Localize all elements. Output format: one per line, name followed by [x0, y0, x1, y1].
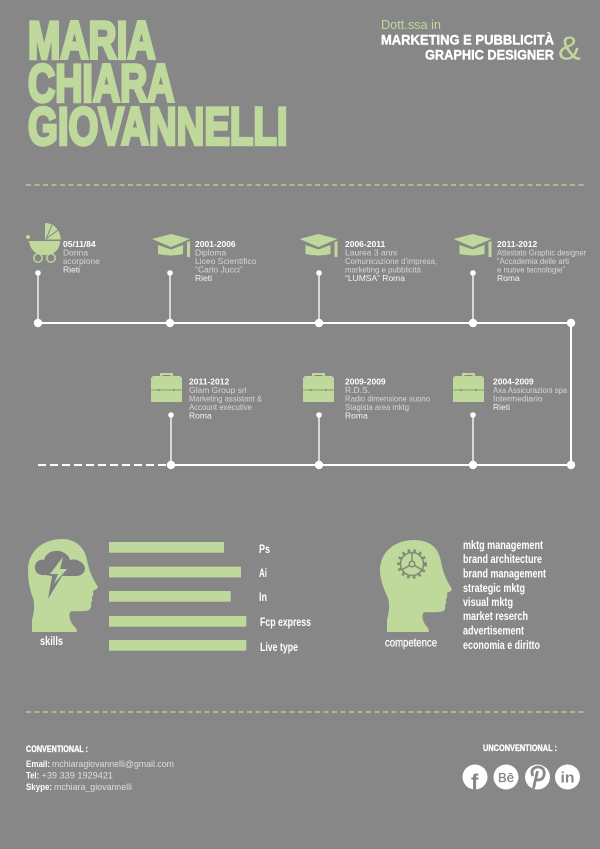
text: diploma: Diploma: [195, 248, 226, 258]
contacts: conventional: CONVENTIONAL :: [26, 744, 88, 754]
icon: behance: [494, 764, 518, 790]
text: graphic design certificate: Attestato Graphic designer: [497, 248, 586, 258]
text: Axa: Axa Assicurazioni spa: [493, 385, 567, 395]
text: R.D.S.: [345, 376, 430, 420]
icon: facebook: f: [471, 770, 479, 794]
skill labels: Ai: [259, 566, 267, 580]
text: graphic design certificate: 2011-2012: [497, 239, 537, 249]
text: degree: [345, 239, 437, 283]
text: Glam Group: Marketing assistant &: [189, 394, 262, 404]
contacts: conventional: Tel:: [26, 770, 39, 782]
title: name: GIOVANNELLI: [28, 98, 288, 156]
contacts: conventional: Skype:: [26, 782, 52, 793]
title: name: CHIARA: [28, 54, 174, 114]
heading: professional role: GRAPHIC DESIGNER: [425, 46, 554, 62]
text: graphic design certificate: “Accademia delle arti: [497, 256, 569, 266]
text: graphic design certificate: [497, 239, 586, 283]
text: Axa: Intermediario: [493, 394, 543, 404]
text: graphic design certificate: e nuove tecnologie”: [497, 264, 565, 274]
text: degree: marketing e pubblicità: [345, 264, 421, 274]
icon: graduation cap 2001: [152, 234, 190, 257]
icon: linkedin: in: [560, 770, 574, 786]
timeline track: [34, 270, 575, 469]
contacts: conventional: mchiaragiovannelli@gmail.com: [52, 759, 174, 770]
competence list: market reserch: [463, 609, 528, 623]
heading: professional role: MARKETING E PUBBLICITÀ: [381, 32, 554, 48]
text: diploma: Rieti: [195, 273, 212, 283]
skill labels: Fcp express: [260, 615, 311, 629]
icon: head with gear: [380, 540, 452, 632]
label: competence: competence: [385, 636, 437, 650]
text: Axa: 2004-2009: [493, 376, 534, 386]
text: diploma: Liceo Scientifico: [195, 256, 257, 266]
icon: baby stroller: [26, 223, 61, 262]
skill labels: Live type: [260, 640, 298, 654]
text: R.D.S.: R.D.S.: [345, 385, 370, 395]
text: Glam Group: [189, 376, 262, 420]
competence list: [463, 538, 546, 652]
text: R.D.S.: Radio dimensione suono: [345, 394, 430, 404]
icon: briefcase Glam Group: [151, 373, 182, 402]
text: R.D.S.: 2009-2009: [345, 376, 386, 386]
text: diploma: “Carlo Jucci”: [195, 264, 243, 274]
heading: professional role: [381, 17, 581, 66]
contacts: conventional: [26, 744, 174, 793]
icon: graduation cap 2011: [454, 234, 492, 257]
icon: pinterest: [525, 764, 550, 790]
title: name: [28, 12, 288, 156]
text: degree: Comunicazione d’impresa,: [345, 256, 437, 266]
contacts: conventional: mchiara_giovannelli: [54, 782, 132, 793]
text: degree: “LUMSA” Roma: [345, 273, 405, 283]
icon: linkedin: [555, 764, 580, 790]
contacts: unconventional heading: UNCONVENTIONAL :: [483, 743, 557, 753]
text: birth info: scorpione: [63, 256, 100, 266]
text: R.D.S.: Roma: [345, 410, 368, 420]
skill labels: Ps: [259, 542, 270, 556]
text: degree: Laurea 3 anni: [345, 248, 397, 258]
text: Glam Group: 2011-2012: [189, 376, 229, 386]
text: Axa: Rieti: [493, 402, 510, 412]
competence list: visual mktg: [463, 595, 513, 609]
competence list: strategic mktg: [463, 581, 525, 595]
competence list: mktg management: [463, 538, 543, 552]
icon: head with storm cloud: [28, 539, 98, 632]
icon: graduation cap 2006: [300, 234, 338, 257]
skill labels: In: [259, 590, 267, 604]
icon: briefcase R.D.S.: [303, 373, 334, 402]
icon: briefcase Axa: [453, 373, 484, 402]
text: diploma: [195, 239, 257, 283]
text: Glam Group: Glam Group srl: [189, 385, 247, 395]
text: graphic design certificate: Roma: [497, 273, 520, 283]
skill labels: [259, 542, 311, 654]
competence list: brand management: [463, 566, 546, 580]
text: diploma: 2001-2006: [195, 239, 236, 249]
icon: behance: Bē: [498, 771, 514, 785]
contacts: conventional: Email:: [26, 759, 50, 770]
text: birth info: Donna: [63, 248, 88, 258]
text: degree: 2006-2011: [345, 239, 385, 249]
text: Axa: [493, 376, 567, 412]
contacts: conventional: +39 339 1929421: [42, 770, 113, 782]
text: Glam Group: Roma: [189, 410, 212, 420]
text: R.D.S.: Stagista area mktg: [345, 402, 409, 412]
competence list: advertisement: [463, 624, 524, 638]
text: birth info: [63, 239, 100, 274]
heading: professional role: Dott.ssa in: [381, 17, 441, 32]
icon: facebook: [462, 764, 488, 794]
label: skills: skills: [40, 634, 63, 648]
competence list: brand architecture: [463, 552, 542, 566]
competence list: economia e diritto: [463, 638, 540, 652]
text: birth info: 05/11/84: [63, 239, 96, 249]
skill bars: [109, 542, 246, 651]
heading: professional role: &: [558, 30, 581, 66]
title: name: MARIA: [28, 12, 156, 70]
text: birth info: Rieti: [63, 264, 80, 274]
text: Glam Group: Account executive: [189, 402, 252, 412]
